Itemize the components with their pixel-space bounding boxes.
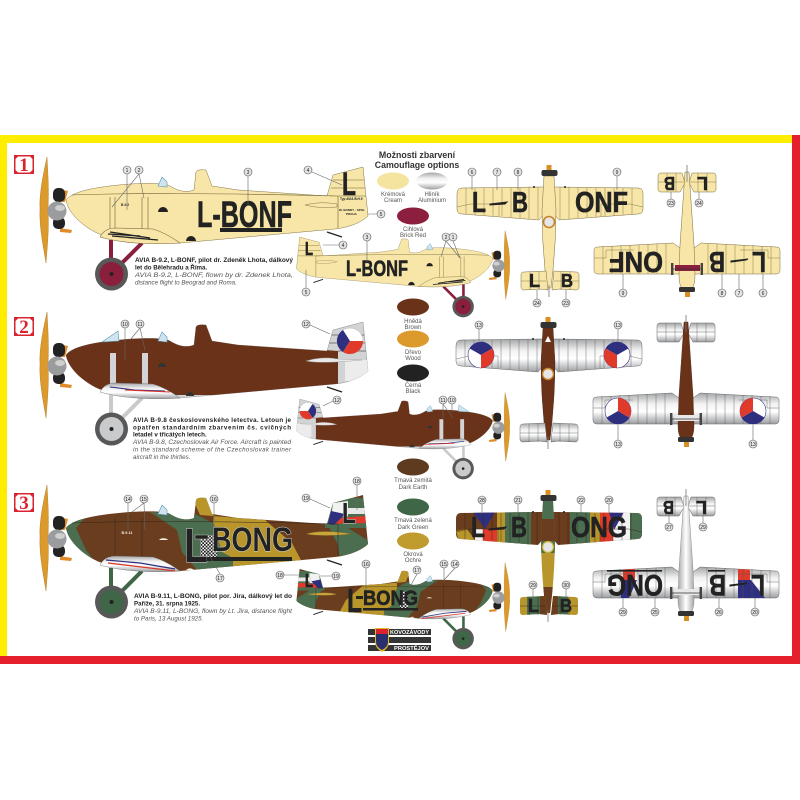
- callout numbers: aircraft 2: 10: [122, 322, 128, 328]
- callout numbers: aircraft 2: 10: [449, 398, 455, 404]
- callout numbers: aircraft 1: [112, 166, 767, 307]
- callout numbers: aircraft 3: 26: [716, 610, 722, 616]
- callout numbers: aircraft 3: 19: [303, 496, 309, 502]
- callout numbers: aircraft 2: 11: [440, 398, 446, 404]
- aircraft 2 top view: [456, 317, 642, 449]
- aircraft 3 underside view: [593, 489, 779, 621]
- aircraft 1 large side view: L-BONF: B.9.2: [121, 203, 129, 207]
- callout numbers: aircraft 2: 13: [750, 442, 756, 448]
- callout numbers: aircraft 1: 7: [496, 170, 499, 176]
- caption: aircraft 3: to Paris, 13 August 1925.: [134, 616, 203, 622]
- callout numbers: aircraft 3: 19: [333, 574, 339, 580]
- callout numbers: aircraft 3: 16: [363, 562, 369, 568]
- caption: aircraft 1: let do Bělehradu a Říma.: [135, 264, 207, 272]
- wing roundels, top: [468, 342, 630, 368]
- aircraft 1 large side view: L-BONF: L: [342, 166, 356, 202]
- callout numbers: aircraft 1: 2: [138, 168, 141, 174]
- swatch: cream: Cream: [384, 198, 402, 204]
- caption: aircraft 2: [132, 417, 292, 461]
- roundel on rudder: [337, 328, 363, 354]
- callout numbers: aircraft 1: 9: [616, 170, 619, 176]
- logo: Kovozávody Prostějov: [368, 628, 431, 652]
- swatch: aluminium: Hliník: [424, 192, 440, 198]
- yellow and red frame: [0, 135, 800, 664]
- aircraft 1 top view: ONF: [575, 187, 628, 219]
- swatch: brown: [397, 298, 429, 331]
- caption: aircraft 2: AVIA B-9.8, Czechoslovak Air Force. Aircraft is painted: [132, 439, 292, 446]
- swatch: wood: Dřevo: [405, 350, 422, 356]
- swatch: dark green: [394, 498, 433, 531]
- aircraft 3 underside view: L: [696, 497, 707, 517]
- aircraft 1 top view: [457, 165, 643, 297]
- callout numbers: aircraft 3: 29: [530, 583, 536, 589]
- callout numbers: aircraft 3: 14: [125, 497, 131, 503]
- swatch: black: [397, 364, 429, 395]
- badge: number 3: [14, 493, 34, 514]
- wing roundels, underside: [605, 398, 766, 424]
- aircraft 3 large side view: L-BONG: BONG: [212, 521, 293, 559]
- callout numbers: aircraft 2: 12: [303, 322, 309, 328]
- caption: aircraft 3: AVIA B-9.11, L-BONG, flown by Lt. Jira, distance flight: [133, 608, 292, 615]
- aircraft 1 top view: L: [529, 271, 540, 291]
- aircraft 3 top view: B: [560, 596, 572, 616]
- aircraft 1 large side view: L-BONF: PRAHA: [346, 212, 358, 216]
- small roundel on rudder: [300, 402, 316, 420]
- aircraft 1 top view: B: [512, 187, 528, 219]
- swatch: cream: Krémová: [381, 192, 406, 198]
- caption: aircraft 2: AVIA B-9.8 československého letectva. Letoun je: [133, 417, 292, 424]
- aircraft 1 top view: L: [472, 187, 486, 219]
- heading: camouflage options: Camouflage options: [375, 160, 459, 170]
- aircraft 3 top view: [456, 490, 643, 622]
- aircraft 1 underside view: B: [664, 173, 675, 193]
- swatch: aluminium: [416, 172, 448, 204]
- aircraft 3 top view: ONG: [571, 512, 627, 544]
- callout numbers: aircraft 3: 21: [515, 498, 521, 504]
- callout numbers: aircraft 1: 24: [696, 201, 702, 207]
- callout numbers: aircraft 1: 2: [445, 235, 448, 241]
- aircraft 1 small side view: L: [305, 239, 313, 259]
- aircraft 3 underside view: B: [709, 568, 726, 601]
- aircraft 2 small side view: [294, 393, 510, 479]
- callout numbers: aircraft 1: 8: [517, 170, 520, 176]
- aircraft 3 top view: L: [471, 512, 485, 544]
- callout numbers: aircraft 1: 5: [380, 212, 383, 218]
- caption: aircraft 2: opatřen standardním zbarvením čs. cvičných: [133, 424, 291, 432]
- swatch: brown: Brown: [404, 325, 422, 331]
- swatch: wood: [397, 330, 429, 362]
- aircraft 3 small side view: [294, 563, 510, 649]
- callout numbers: aircraft 3: 14: [452, 562, 458, 568]
- callout numbers: aircraft 3: 17: [414, 568, 420, 574]
- aircraft 3 small side view: L: [305, 571, 313, 591]
- aircraft 1 large side view: L-BONF: W. BONDY - SPOL: [339, 208, 365, 212]
- callout numbers: aircraft 1: 4: [342, 243, 345, 249]
- caption: aircraft 2: letadel v třicátých letech.: [133, 432, 207, 438]
- aircraft 1 underside view: [594, 165, 780, 297]
- callout numbers: aircraft 3: 16: [211, 497, 217, 503]
- logo: Kovozávody Prostějov: PROSTĚJOV: [394, 644, 430, 652]
- callout numbers: aircraft 2: 12: [334, 398, 340, 404]
- aircraft 3 large side view: L-BONG: [40, 485, 372, 618]
- heading: camouflage options: [375, 150, 459, 170]
- callout numbers: aircraft 2: 13: [615, 442, 621, 448]
- aircraft 1 small side view: [296, 231, 510, 317]
- aircraft 3 top view: L: [528, 596, 539, 616]
- callout numbers: aircraft 3: 27: [666, 525, 672, 531]
- swatch: ochre: [397, 532, 429, 564]
- badge: number 1: 1: [19, 155, 29, 176]
- caption: aircraft 3: Paříže, 31. srpna 1925.: [134, 600, 200, 608]
- aircraft 3 small side view: L: [347, 582, 362, 619]
- caption: aircraft 1: AVIA B-9.2, L-BONF, pilot dr. Zdeněk Lhota, dálkový: [135, 257, 294, 264]
- caption: aircraft 1: [134, 257, 294, 286]
- callout numbers: aircraft 1: 1: [452, 235, 455, 241]
- callout numbers: aircraft 3: 20: [752, 610, 758, 616]
- aircraft 1 top view: B: [561, 271, 573, 291]
- aircraft 1 large side view: L-BONF: [40, 157, 368, 290]
- aircraft 3 underside view: ONG: [607, 568, 663, 601]
- aircraft 3 small side view: BONG: [363, 587, 418, 610]
- callout numbers: aircraft 3: 15: [441, 562, 447, 568]
- callout numbers: aircraft 2: 11: [137, 322, 143, 328]
- aircraft 2 large side view: [40, 312, 372, 446]
- swatch: brick red: [397, 208, 429, 239]
- callout numbers: aircraft 1: 8: [721, 291, 724, 297]
- callout numbers: aircraft 1: 6: [471, 170, 474, 176]
- callout numbers: aircraft 2: 13: [476, 323, 482, 329]
- swatch: brick red: Brick Red: [400, 233, 426, 239]
- callout numbers: aircraft 1: 23: [563, 301, 569, 307]
- callout numbers: aircraft 3: 28: [479, 498, 485, 504]
- caption: aircraft 1: AVIA B-9.2, L-BONF, flown by dr. Zdenek Lhota,: [134, 272, 293, 279]
- callout numbers: aircraft 3: 22: [578, 498, 584, 504]
- callout numbers: aircraft 1: 7: [738, 291, 741, 297]
- swatch: dark earth: [394, 458, 432, 491]
- callout numbers: aircraft 2: [121, 320, 757, 448]
- callout numbers: aircraft 3: 17: [217, 576, 223, 582]
- callout numbers: aircraft 3: 20: [606, 498, 612, 504]
- callout numbers: aircraft 1: 23: [668, 201, 674, 207]
- aircraft 3 underside view: L: [751, 568, 765, 601]
- callout numbers: aircraft 3: 29: [700, 525, 706, 531]
- caption: aircraft 2: in the standard scheme of the Czechoslovak trainer: [133, 446, 292, 454]
- callout numbers: aircraft 3: 29: [620, 610, 626, 616]
- aircraft 1 large side view: L-BONF: Typ AVIA B.H.9: [340, 197, 363, 201]
- callout numbers: aircraft 3: [124, 477, 759, 616]
- swatch: aluminium: Aluminium: [418, 198, 446, 204]
- callout numbers: aircraft 1: 1: [126, 168, 129, 174]
- swatch: black: Black: [406, 389, 421, 395]
- callout numbers: aircraft 1: 5: [305, 290, 308, 296]
- swatch: ochre: Ochre: [405, 558, 422, 564]
- swatch: dark earth: Dark Earth: [399, 485, 427, 491]
- swatch: dark green: Tmavá zelená: [394, 518, 433, 524]
- swatch: dark green: Dark Green: [397, 525, 429, 531]
- swatch: black: Černá: [405, 382, 422, 389]
- aircraft 1 small side view: L-BONF: [346, 256, 408, 281]
- badge: number 2: 2: [19, 317, 29, 338]
- aircraft 1 underside view: ONF: [609, 245, 663, 277]
- callout numbers: aircraft 1: 24: [534, 301, 540, 307]
- aircraft 3 large side view: L-BONG: L: [342, 498, 356, 530]
- badge: number 1: [14, 155, 34, 176]
- badge: number 2: [14, 317, 34, 338]
- callout numbers: aircraft 3: 15: [141, 497, 147, 503]
- swatch: ochre: Okrová: [403, 552, 423, 558]
- aircraft 2 underside view: [593, 315, 779, 447]
- caption: aircraft 1: distance flight to Beograd and Roma.: [135, 280, 237, 286]
- caption: aircraft 3: [133, 593, 292, 622]
- callout numbers: aircraft 1: 3: [247, 170, 250, 176]
- swatch: dark earth: Tmavá zemitá: [394, 478, 432, 484]
- aircraft 1 underside view: B: [709, 245, 725, 277]
- heading: camouflage options: Možnosti zbarvení: [379, 150, 456, 160]
- logo: Kovozávody Prostějov: KOVOZÁVODY: [390, 629, 430, 636]
- swatch: brown: Hnědá: [404, 319, 422, 325]
- aircraft 3 large side view: L-BONG: L: [184, 520, 208, 573]
- caption: aircraft 3: AVIA B-9.11, L-BONG, pilot por. Jira, dálkový let do: [134, 593, 292, 600]
- callout numbers: aircraft 2: 13: [615, 323, 621, 329]
- aircraft 1 underside view: L: [752, 245, 766, 277]
- callout numbers: aircraft 3: 18: [277, 573, 283, 579]
- aircraft 1 underside view: L: [697, 173, 708, 193]
- swatch: brick red: Cihlová: [403, 227, 424, 233]
- callout numbers: aircraft 3: 18: [354, 479, 360, 485]
- colour legend: [377, 172, 448, 564]
- aircraft 3 underside view: B: [663, 497, 674, 517]
- callout numbers: aircraft 1: 4: [307, 168, 310, 174]
- swatch: cream: [377, 172, 409, 204]
- swatch: wood: Wood: [405, 356, 421, 362]
- aircraft 1 large side view: L-BONF: L-BONF: [197, 194, 292, 235]
- aircraft 3 top view: B: [511, 512, 527, 544]
- callout numbers: aircraft 3: 30: [563, 583, 569, 589]
- badge: number 3: 3: [19, 493, 29, 514]
- caption: aircraft 2: aircraft in the thirties.: [133, 454, 190, 461]
- callout numbers: aircraft 1: 6: [762, 291, 765, 297]
- callout numbers: aircraft 3: 25: [652, 610, 658, 616]
- callout numbers: aircraft 1: 9: [622, 291, 625, 297]
- aircraft 3 large side view: L-BONG: B.9.11: [122, 531, 132, 535]
- callout numbers: aircraft 1: 3: [366, 235, 369, 241]
